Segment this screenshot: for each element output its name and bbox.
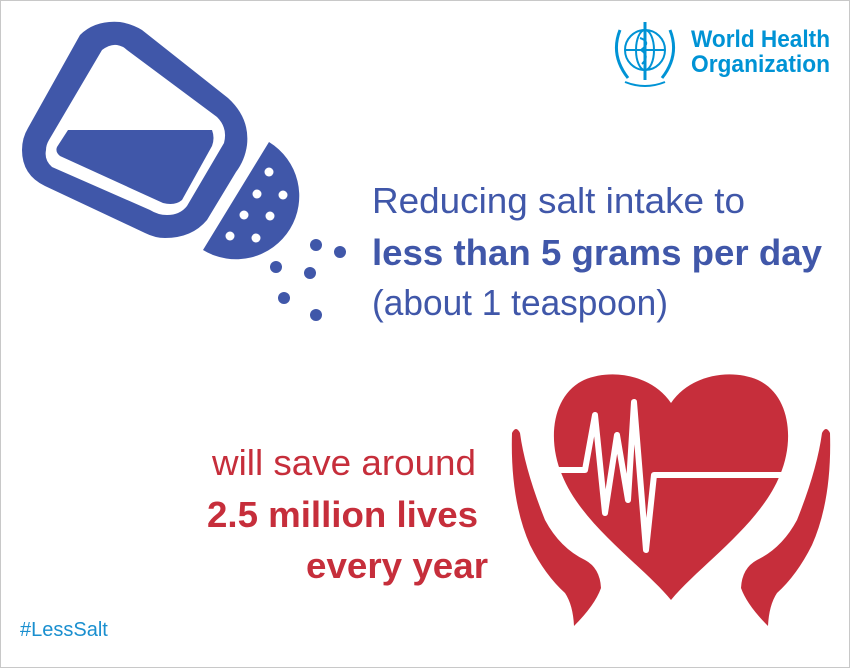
WHO logo: Organization	[691, 51, 830, 78]
shaker cap	[203, 142, 299, 259]
salt grains	[310, 239, 322, 251]
shaker body outline	[22, 22, 247, 238]
right hand	[741, 429, 830, 626]
text block: salt message	[372, 180, 822, 323]
salt level fill	[56, 130, 213, 204]
WHO text: World Health	[691, 26, 830, 53]
text block: lives saved: will save around	[211, 442, 476, 483]
emblem	[616, 22, 674, 86]
WHO logo	[616, 22, 830, 86]
text block: salt message: less than 5 grams per day	[372, 232, 822, 273]
hashtag: #LessSalt	[20, 619, 108, 641]
ECG line	[556, 402, 785, 550]
icon: heart in hands	[512, 374, 830, 626]
heart	[554, 374, 788, 600]
text block: salt message: (about 1 teaspoon)	[372, 282, 668, 323]
icon: salt shaker	[22, 22, 346, 321]
text block: lives saved: 2.5 million lives	[207, 494, 478, 535]
left hand	[512, 429, 601, 626]
text block: salt message: Reducing salt intake to	[372, 180, 745, 221]
text block: lives saved: every year	[306, 545, 488, 586]
text block: lives saved	[207, 442, 488, 586]
